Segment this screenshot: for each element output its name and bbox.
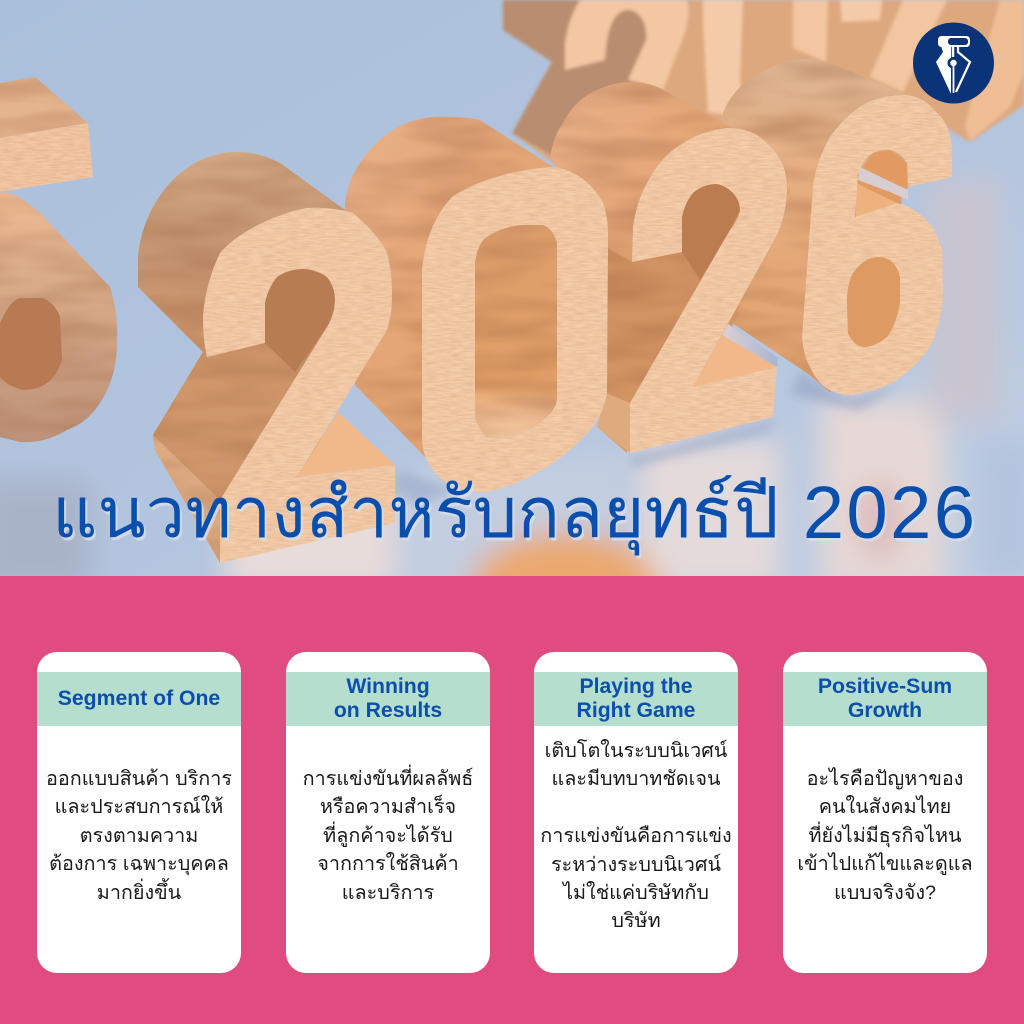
card text: ระหว่างระบบนิเวศน์ (551, 854, 721, 876)
card: Winning on Results (286, 652, 490, 973)
card heading (783, 672, 987, 726)
card text: ที่ยังไม่มีธุรกิจไหน (808, 825, 962, 847)
card text: ที่ลูกค้าจะได้รับ (323, 825, 453, 847)
card text: มากยิ่งขึ้น (97, 882, 181, 904)
card heading: Positive-Sum (818, 675, 952, 698)
card text: ออกแบบสินค้า บริการ (46, 768, 232, 790)
card heading: on Results (334, 699, 442, 722)
pink lower panel (0, 576, 1024, 1024)
card text: ตรงตามความ (80, 825, 198, 847)
card text: จากการใช้สินค้า (317, 853, 459, 875)
background numerals: blurred row (503, 0, 1024, 165)
card text (540, 739, 732, 932)
card text: ต้องการ เฉพาะบุคคล (49, 853, 229, 875)
card text: เข้าไปแก้ไขและดูแล (797, 853, 973, 875)
numeral: cropped left 6 (0, 77, 117, 442)
card text (303, 764, 473, 904)
title: 2026 (803, 471, 978, 554)
card: Positive-Sum Growth (783, 652, 987, 973)
card heading: Segment of One (58, 687, 220, 710)
card text: และประสบการณ์ให้ (55, 796, 223, 818)
title: แนวทางสำหรับกลยุทธ์ปี (52, 473, 779, 552)
card heading: Growth (848, 699, 922, 722)
card: Segment of One (37, 652, 241, 973)
card text (797, 767, 973, 904)
card text: หรือความสำเร็จ (320, 796, 456, 818)
hero photo: wooden 2026 numerals (0, 0, 1024, 576)
card text: และบริการ (342, 882, 434, 904)
floor reflections (0, 180, 1024, 648)
numeral: 6 (700, 59, 952, 395)
card heading (534, 672, 738, 726)
card heading: Playing the (579, 675, 693, 698)
card text: การแข่งขันที่ผลลัพธ์ (303, 768, 473, 790)
card text: อะไรคือปัญหาของ (807, 768, 963, 790)
icon: pen nib logo (913, 22, 994, 104)
card: Playing the Right Game (534, 652, 738, 973)
card text: บริษัท (611, 910, 661, 932)
contact shadows (390, 372, 900, 505)
card heading (286, 672, 490, 726)
card heading: Right Game (577, 699, 695, 722)
numeral: first 2 (138, 152, 395, 563)
card text: เติบโตในระบบนิเวศน์ (545, 740, 727, 762)
card text: การแข่งขันคือการแข่ง (540, 825, 732, 847)
card heading (37, 672, 241, 726)
card text (46, 768, 232, 904)
card text: ไม่ใช่แค่บริษัทกับ (563, 882, 709, 904)
background: blue studio backdrop (0, 0, 1024, 576)
card heading: Winning (346, 675, 430, 698)
numeral: second 2 (550, 82, 790, 453)
card text: คนในสังคมไทย (819, 796, 951, 818)
numeral: 0 (345, 117, 608, 492)
card text: แบบจริงจัง? (834, 882, 936, 904)
card text: และมีบทบาทชัดเจน (552, 768, 720, 790)
